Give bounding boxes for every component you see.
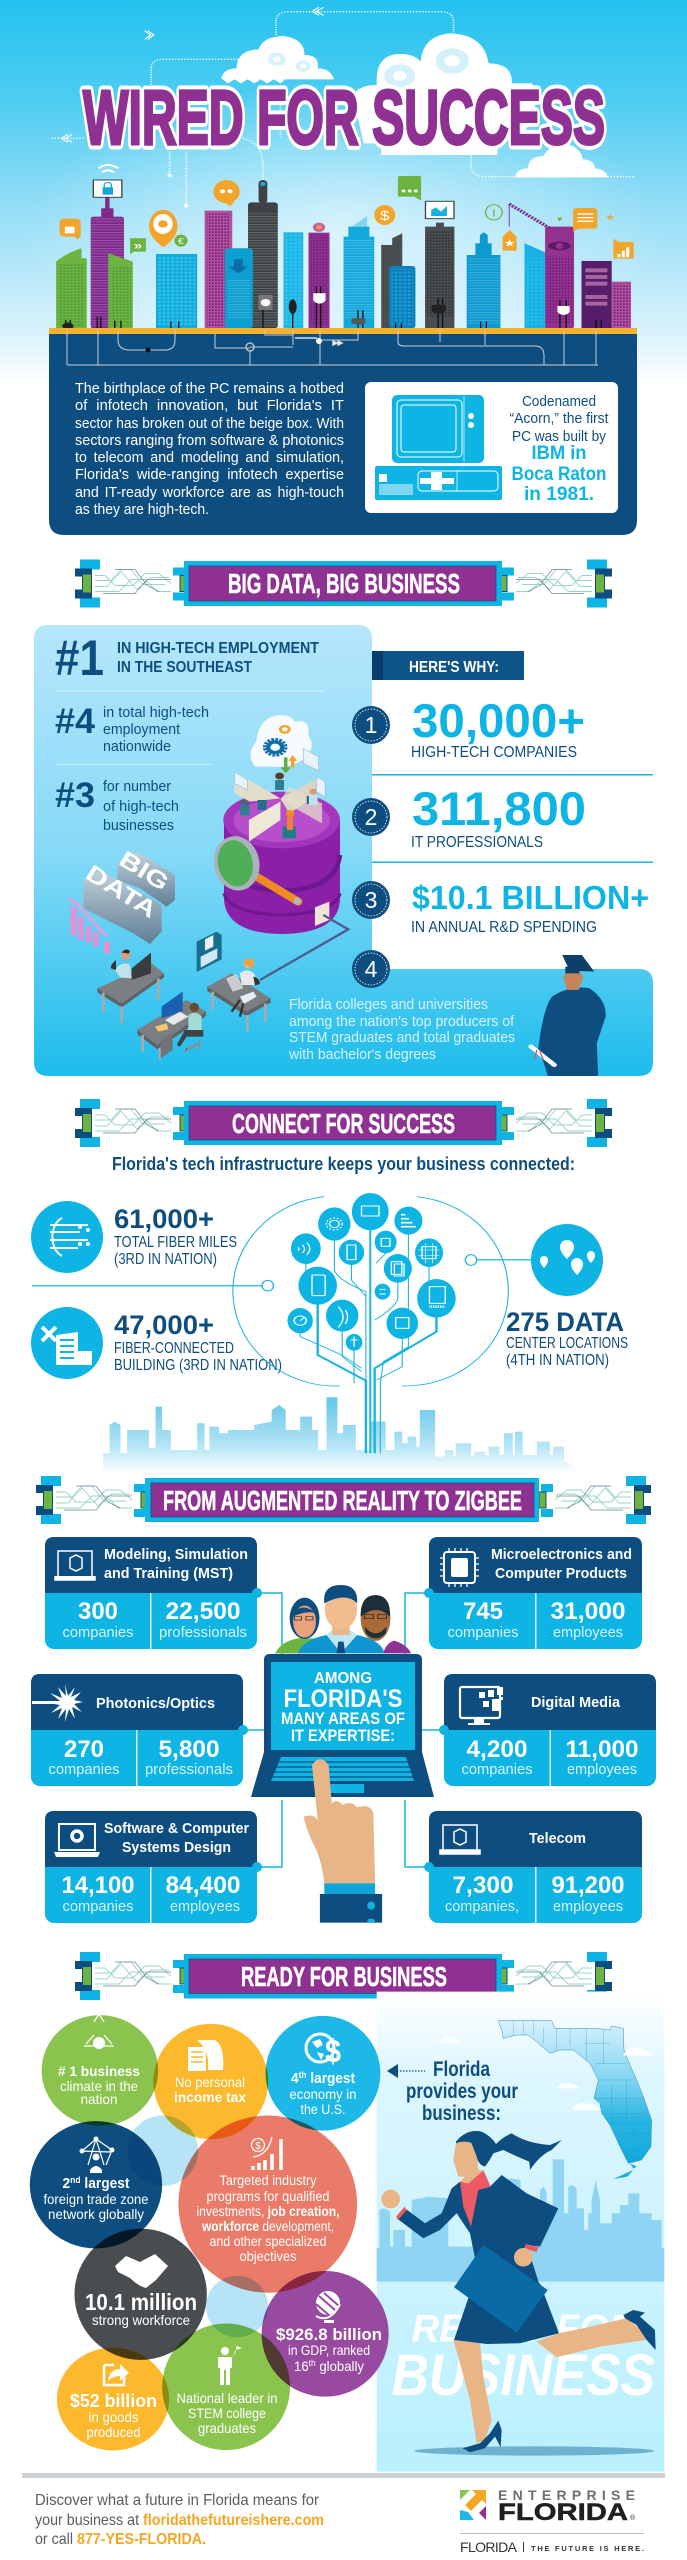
callout text: Codenamed — [522, 394, 596, 410]
icon: dollar bubble — [374, 205, 395, 225]
stat: #1 in high-tech employment: #1 — [55, 630, 104, 686]
hands and cuffs — [381, 2190, 400, 2208]
icon: green chevron bubble: » — [134, 239, 142, 252]
florida map — [498, 2021, 652, 2179]
illustration: big data database and office — [68, 792, 348, 1060]
stat 4: graduates: with bachelor's degrees — [288, 1046, 436, 1063]
stat: data centers — [475, 1224, 628, 1369]
icon: wifi — [99, 165, 118, 172]
icon: info circle — [486, 205, 502, 220]
heading banner: augmented reality — [36, 1476, 651, 1524]
icon: laptop gear — [54, 1824, 100, 1857]
card: microelectronics and computer products: employees — [553, 1624, 623, 1641]
footer call to action: Discover what a future in Florida means for — [35, 2492, 320, 2509]
bubble: strong workforce: strong workforce — [92, 2312, 190, 2328]
bubble: no income tax: No personal — [175, 2074, 245, 2090]
desk with person at blue screen — [137, 992, 206, 1060]
database cylinder — [223, 792, 340, 934]
bubble: fourth largest economy: th — [299, 2070, 307, 2080]
card: software and computer systems design: Systems Design — [122, 1839, 231, 1856]
bubble: GDP: globally — [316, 2358, 364, 2374]
pink bar chart — [68, 898, 110, 953]
card: software and computer systems design: companies — [62, 1898, 134, 1915]
stat: data centers: (4TH IN NATION) — [506, 1352, 609, 1369]
stat: #3 number of businesses: businesses — [103, 817, 174, 834]
intro paragraph: of infotech innovation, but Florida's IT — [75, 397, 344, 414]
card: photonics optics — [31, 1674, 248, 1786]
bubble: foreign trade zone — [44, 2136, 149, 2222]
bubble: goods produced: $52 billion — [70, 2391, 157, 2411]
illustration: office cubicles on database, cloud above — [234, 715, 325, 842]
subheading: tech infrastructure: Florida's tech infrastructure keeps your business connected: — [112, 1154, 575, 1174]
logo: enterprise florida: FLORIDA — [498, 2499, 628, 2526]
card: modeling simulation and training — [45, 1537, 262, 1649]
card: telecom: 91,200 — [552, 1872, 624, 1899]
bubble: targeted industry programs: and other specialized — [210, 2234, 326, 2249]
desk with man at monitor — [97, 949, 164, 1023]
card: microelectronics and computer products: 745 — [463, 1598, 503, 1625]
stat: fiber-connected buildings: FIBER-CONNECTED — [114, 1340, 234, 1357]
bubble: STEM graduates: STEM college — [188, 2405, 266, 2421]
ghost text: READY FOR — [412, 2308, 637, 2351]
stat: fiber miles — [31, 1201, 237, 1273]
logo mark — [460, 2490, 486, 2520]
stat 2: professionals: IT PROFESSIONALS — [411, 834, 543, 851]
stat: fiber miles: 61,000+ — [114, 1204, 214, 1234]
stat 3: R&D spending — [352, 879, 649, 936]
footer call to action: or call 877-YES-FLORIDA. — [35, 2531, 206, 2548]
bubble: foreign trade zone: network globally — [48, 2206, 144, 2222]
card: photonics optics: 270 — [64, 1736, 104, 1763]
icon: small heart and star — [557, 213, 616, 223]
icon: map pins — [531, 1224, 603, 1296]
stat: #4 nationwide — [55, 702, 209, 755]
bubble: fourth largest economy: 4 — [291, 2071, 299, 2087]
icon: star tag: ★ — [504, 238, 516, 249]
collar — [460, 2170, 491, 2227]
stat: #3 number of businesses: of high-tech — [103, 798, 179, 815]
stat 4: graduates: Florida colleges and universities — [289, 996, 488, 1013]
tagline: FLORIDA — [460, 2539, 518, 2555]
bubble: business climate: # 1 business — [58, 2063, 140, 2079]
stat 4: graduates: among the nation's top producers of — [289, 1013, 515, 1030]
footer call to action — [35, 2492, 324, 2548]
bubble: goods produced — [70, 2364, 157, 2440]
bubble: foreign trade zone: largest — [81, 2176, 130, 2192]
bubble: fourth largest economy: the U.S. — [300, 2101, 346, 2117]
panel: here's why list — [288, 651, 653, 1076]
bubble: goods produced: in goods — [88, 2409, 138, 2425]
icon: laptop cube — [55, 1551, 95, 1580]
man with beard — [361, 1595, 411, 1653]
text: florida provides your business: business: — [422, 2102, 501, 2125]
bubble: targeted industry programs: programs for qualified — [206, 2189, 330, 2204]
stat 4: graduates — [288, 950, 515, 1063]
callout text — [510, 394, 608, 505]
bubble: targeted industry programs: investments, job creation, — [196, 2204, 340, 2219]
stat 4: graduates: STEM graduates and total graduates — [289, 1029, 515, 1046]
illustration: pointing hand — [304, 1759, 382, 1923]
bubble: strong workforce: 10.1 million — [85, 2289, 197, 2315]
intro paragraph: The birthplace of the PC remains a hotbed — [75, 380, 344, 397]
stat: #1 in high-tech employment: IN THE SOUTHEAST — [117, 659, 252, 676]
stat 3: R&D spending: 3 — [365, 887, 377, 913]
tagline — [460, 2539, 644, 2555]
callout text: in 1981. — [524, 484, 594, 505]
header clouds and dotted connections — [52, 7, 635, 207]
central man — [298, 1585, 385, 1653]
bubble: GDP: in GDP, ranked — [288, 2342, 370, 2358]
icon: signal bubble — [613, 239, 634, 259]
card: software and computer systems design — [45, 1811, 262, 1923]
heading banner: connect for success: CONNECT FOR SUCCESS — [232, 1108, 455, 1139]
illustration: laptop with screen text — [251, 1654, 434, 1797]
hair and ponytail — [456, 2131, 562, 2170]
intro paragraph: sectors ranging from software & photonics — [75, 432, 344, 449]
heading banner: big data — [75, 560, 612, 608]
intro paragraph: as they are high-tech. — [75, 501, 209, 518]
connector lines between cards and laptop — [243, 1593, 444, 1867]
device icons — [294, 1206, 445, 1347]
intro paragraph — [75, 380, 344, 518]
bubble: STEM graduates: graduates — [198, 2420, 256, 2436]
here's why tag: HERE'S WHY: — [409, 659, 499, 676]
bubble: GDP: 16 — [294, 2358, 310, 2374]
card: photonics optics: 5,800 — [158, 1736, 220, 1763]
bubble: no income tax — [174, 2040, 246, 2105]
logo: enterprise florida: ENTERPRISE — [498, 2487, 635, 2503]
cubicle cross — [234, 772, 322, 842]
stat: data centers: CENTER LOCATIONS — [506, 1335, 628, 1352]
callout text: “Acorn,” the first — [510, 411, 608, 427]
card: digital media: companies — [462, 1761, 532, 1778]
neck and face — [453, 2142, 483, 2183]
header sky background — [0, 0, 687, 385]
stat 2: professionals — [352, 782, 586, 851]
card: software and computer systems design: 14,100 — [62, 1872, 134, 1899]
bubble chart of business advantages — [30, 2014, 389, 2450]
city skyline illustration — [56, 180, 631, 329]
intro paragraph: to telecom and modeling and simulation, — [75, 449, 344, 466]
card: microelectronics and computer products — [424, 1537, 642, 1649]
magnifying glass — [209, 832, 301, 905]
arrow pointing to circles — [387, 2064, 425, 2078]
heading banner: ready for business — [75, 1952, 612, 2000]
stat: #4 nationwide: in total high-tech — [103, 704, 209, 721]
bubble: GDP: $926.8 billion — [276, 2325, 382, 2344]
card: microelectronics and computer products: Microelectronics and — [491, 1546, 632, 1563]
floppy disk — [197, 932, 222, 972]
bubble: fourth largest economy: $ — [325, 2033, 341, 2069]
intro paragraph: sector has broken out of the beige box. With — [75, 415, 344, 432]
jacket — [397, 2175, 558, 2287]
bubble: targeted industry programs: $ — [255, 2141, 261, 2152]
icon: orange padlock bubble — [60, 219, 81, 239]
laptop screen text: AMONG — [314, 1670, 372, 1687]
device nodes — [287, 1193, 456, 1351]
bubble: targeted industry programs: workforce development, — [201, 2219, 334, 2234]
text: florida provides your business — [406, 2058, 518, 2125]
icon: euro badge — [174, 235, 188, 247]
card: modeling simulation and training: 300 — [78, 1598, 118, 1625]
shadow — [414, 2446, 654, 2456]
card: digital media: 11,000 — [566, 1736, 638, 1763]
stat: #1 in high-tech employment: IN HIGH-TECH EMPLOYMENT — [117, 640, 319, 657]
bubble: GDP — [276, 2291, 382, 2374]
callout text: PC was built by — [512, 429, 607, 445]
cloud with gears — [251, 715, 312, 773]
stat 1: companies: 1 — [365, 712, 377, 738]
card: modeling simulation and training: and Training (MST) — [104, 1565, 233, 1582]
text: florida provides your business: provides your — [406, 2080, 518, 2103]
card: photonics optics: companies — [48, 1761, 120, 1778]
stat 1: companies: 30,000+ — [412, 694, 585, 747]
stat: #3 number of businesses: #3 — [55, 776, 95, 815]
card: telecom: companies, — [445, 1898, 519, 1915]
icon: laptop cube — [440, 1825, 480, 1854]
card: digital media: 4,200 — [466, 1736, 528, 1763]
card: digital media: employees — [567, 1761, 637, 1778]
illustration: three professionals — [275, 1585, 411, 1653]
running businesswoman — [381, 2131, 656, 2452]
icon: map pin bubble — [149, 210, 177, 247]
stat 1: companies: HIGH-TECH COMPANIES — [411, 744, 577, 761]
city app icons — [60, 165, 634, 259]
bubble: no income tax: income tax — [174, 2089, 246, 2105]
big data 3D text — [81, 846, 175, 944]
card: telecom: 7,300 — [452, 1872, 514, 1899]
card: photonics optics: professionals — [145, 1761, 233, 1778]
card: telecom: Telecom — [529, 1830, 586, 1847]
stat: #4 nationwide: employment — [103, 721, 181, 738]
bubble: business climate — [58, 2014, 140, 2107]
stat 4: graduates: 4 — [365, 956, 378, 982]
bubble: foreign trade zone: 2 — [62, 2176, 71, 2192]
icon: fiber optic — [31, 1201, 103, 1273]
stat 2: professionals: 311,800 — [412, 782, 586, 835]
icon: small heart and star: ★ — [605, 213, 616, 223]
panel: florida provides your business — [377, 1992, 664, 2472]
card: modeling simulation and training: Modeling, Simulation — [104, 1546, 248, 1563]
keyboard — [271, 1757, 414, 1793]
laptop screen text — [281, 1670, 405, 1745]
bubble: fourth largest economy — [290, 2033, 356, 2117]
stat: data centers: 275 DATA — [506, 1307, 624, 1337]
woman — [275, 1598, 320, 1653]
here's why tag — [372, 651, 524, 680]
icon: chart screen — [425, 201, 454, 219]
laptop screen text: MANY AREAS OF — [281, 1710, 405, 1728]
floating windows — [234, 748, 325, 797]
desk with woman at laptop — [207, 958, 271, 1032]
icon: orange note bubble — [573, 208, 597, 232]
stat: #3 number of businesses — [55, 776, 179, 834]
bubble: foreign trade zone: nd — [70, 2175, 81, 2185]
bubble: business climate: climate in the — [60, 2078, 138, 2094]
skyline silhouette — [377, 2159, 664, 2282]
panel: intro navy panel — [49, 328, 637, 535]
card: digital media — [439, 1674, 656, 1786]
icon: orange chat — [213, 180, 240, 206]
circuit lines — [67, 330, 598, 365]
stat: fiber-connected buildings: 47,000+ — [114, 1310, 214, 1340]
illustration: graduate — [531, 955, 606, 1076]
big data 3D text: DATA — [81, 860, 162, 923]
icon: green chat — [398, 176, 421, 201]
heading banner: connect for success — [75, 1099, 612, 1147]
ghost text: BUSINESS — [392, 2344, 655, 2408]
footer call to action: your business at floridathefutureishere.com — [35, 2512, 324, 2529]
stat: #4 nationwide: #4 — [55, 702, 96, 741]
card: photonics optics: Photonics/Optics — [96, 1695, 215, 1712]
stat: fiber miles: (3RD IN NATION) — [114, 1251, 217, 1268]
panel: big data, left gradient panel — [34, 625, 653, 1076]
bubble: fourth largest economy: economy in — [290, 2086, 356, 2102]
laptop screen text: IT EXPERTISE: — [291, 1727, 395, 1745]
card: microelectronics and computer products: companies — [448, 1624, 518, 1641]
stat 3: R&D spending: IN ANNUAL R&D SPENDING — [411, 919, 597, 936]
icon: star tag — [503, 230, 517, 251]
card: modeling simulation and training: companies — [62, 1624, 134, 1641]
bubble: foreign trade zone: foreign trade zone — [44, 2191, 149, 2207]
card: microelectronics and computer products: Computer Products — [495, 1565, 627, 1582]
card: modeling simulation and training: 22,500 — [166, 1598, 240, 1625]
icon: microchip — [440, 1548, 479, 1587]
card: software and computer systems design: Software & Computer — [104, 1820, 249, 1837]
connector dots — [262, 1255, 477, 1291]
icon: connected building — [31, 1307, 103, 1379]
icon: euro badge: € — [178, 237, 185, 246]
tree of connected devices — [233, 1193, 508, 1453]
icon: vintage computer — [375, 395, 502, 500]
bubble: STEM graduates: National leader in — [176, 2390, 278, 2406]
footer divider — [22, 2473, 665, 2478]
logo: enterprise florida — [460, 2487, 644, 2555]
laptop screen text: FLORIDA'S — [284, 1685, 402, 1713]
stat 3: R&D spending: $10.1 BILLION+ — [412, 879, 649, 916]
icon: small heart and star: ♥ — [557, 214, 562, 223]
bubble: targeted industry programs: Targeted industry — [220, 2173, 317, 2188]
card: telecom: employees — [553, 1898, 623, 1915]
bubble: fourth largest economy: largest — [307, 2071, 355, 2087]
front leg and shoe — [453, 2340, 492, 2443]
heading banner: ready for business: READY FOR BUSINESS — [241, 1961, 447, 1992]
bubble: goods produced: produced — [86, 2424, 140, 2440]
stat 1: companies — [352, 694, 585, 761]
text: florida provides your business: Florida — [433, 2058, 490, 2081]
icon: laser burst — [32, 1684, 83, 1722]
icon: green chevron bubble — [130, 238, 146, 254]
stat: #1 in high-tech employment — [55, 630, 319, 686]
stat: #3 number of businesses: for number — [103, 778, 171, 795]
card: microelectronics and computer products: 31,000 — [550, 1598, 626, 1625]
ghost text — [392, 2308, 655, 2408]
icon: lock screen — [93, 180, 122, 197]
icon: monitor pixels — [460, 1687, 503, 1725]
branches — [300, 1223, 436, 1453]
skyline behind tree — [103, 1397, 578, 1473]
bubble: strong workforce — [85, 2254, 197, 2328]
bubble: targeted industry programs: objectives — [240, 2249, 297, 2264]
intro paragraph: Florida's wide-ranging infotech expertise — [75, 466, 344, 483]
intro paragraph: and IT-ready workforce are as high-touch — [75, 484, 344, 501]
skirt — [454, 2283, 559, 2344]
card: software and computer systems design: employees — [170, 1898, 240, 1915]
stat: fiber miles: TOTAL FIBER MILES — [114, 1234, 237, 1251]
stat 2: professionals: 2 — [365, 804, 377, 830]
bubble: business climate: nation — [80, 2091, 118, 2107]
logo: enterprise florida: ® — [630, 2514, 636, 2522]
big data 3D text: BIG — [115, 846, 174, 896]
callout: first PC card — [365, 382, 618, 513]
bubble: STEM graduates — [176, 2346, 278, 2436]
callout text: Boca Raton — [512, 464, 606, 485]
card: telecom — [424, 1811, 642, 1923]
stat: fiber-connected buildings — [31, 1307, 282, 1379]
card: modeling simulation and training: professionals — [159, 1624, 247, 1641]
bubble: targeted industry programs — [196, 2137, 340, 2264]
back leg and shoe — [537, 2318, 647, 2357]
card: software and computer systems design: 84,400 — [166, 1872, 240, 1899]
enclosing arcs — [233, 1197, 508, 1386]
card: digital media: Digital Media — [531, 1694, 621, 1711]
small clouds — [438, 2037, 654, 2110]
cable from database to desk — [260, 902, 348, 980]
heading banner: big data: BIG DATA, BIG BUSINESS — [228, 568, 460, 599]
stat: #4 nationwide: nationwide — [103, 738, 171, 755]
icon: dollar bubble: $ — [380, 209, 390, 223]
stat: fiber-connected buildings: BUILDING (3RD IN NATION) — [114, 1357, 282, 1374]
callout text: IBM in — [532, 443, 586, 464]
tagline: THE FUTURE IS HERE. — [531, 2544, 644, 2553]
bubble: GDP: th — [309, 2358, 316, 2368]
overlapping circles — [30, 2015, 389, 2450]
briefcase — [454, 2245, 548, 2333]
